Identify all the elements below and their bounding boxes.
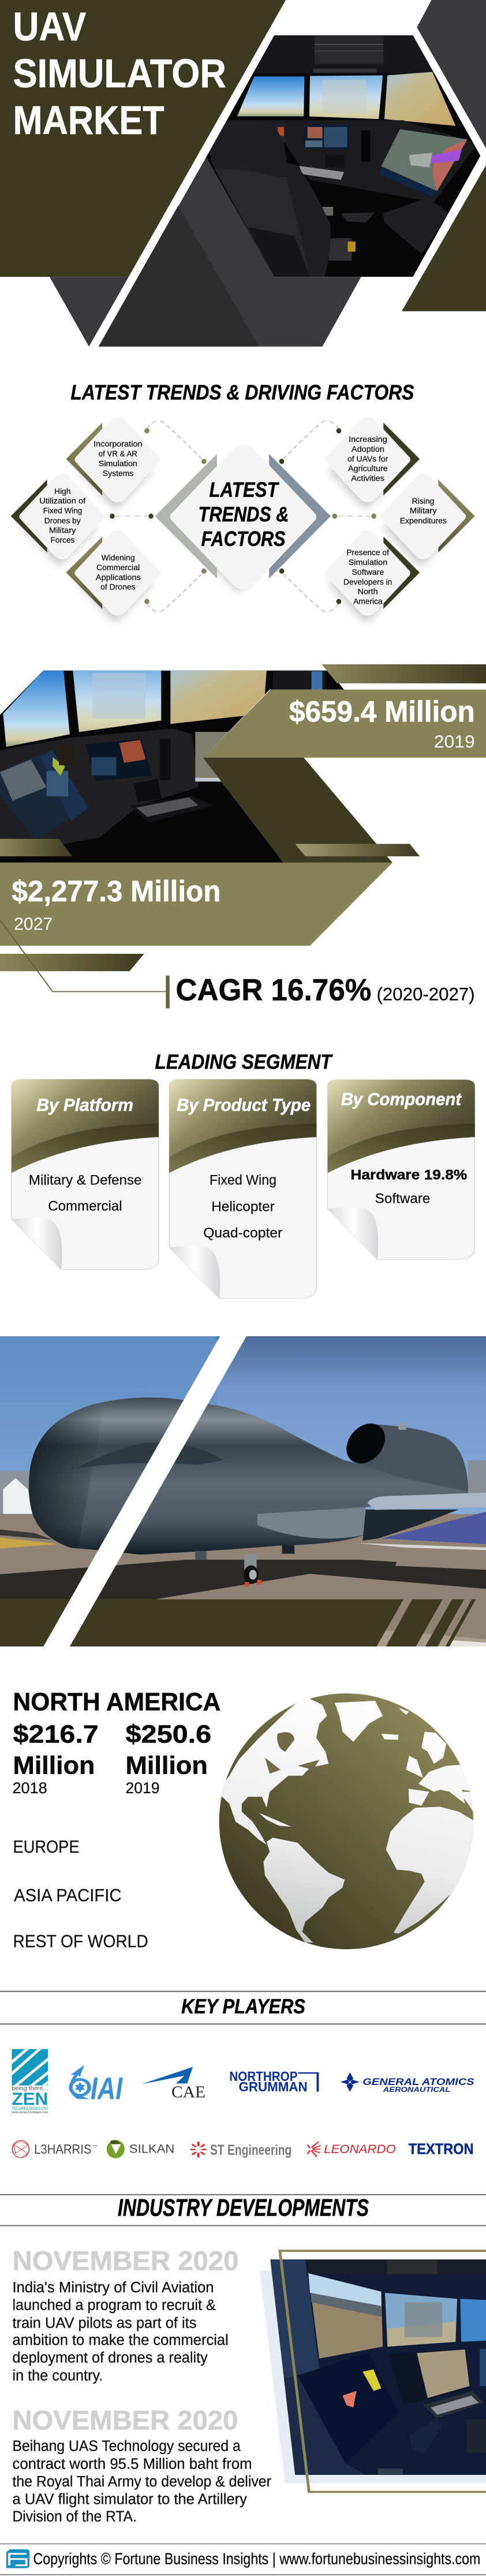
- north america stats: 2019: [125, 1779, 160, 1797]
- shape: lower dark triangle: [99, 206, 259, 347]
- connector lines: [115, 421, 371, 612]
- logo: silkan: [107, 2140, 174, 2158]
- development two: Division of the RTA.: [12, 2508, 137, 2525]
- heading rule bottom: [0, 2023, 486, 2025]
- development one: India's Ministry of Civil Aviation: [12, 2280, 214, 2296]
- panel: 2027 value: 2027: [14, 915, 53, 934]
- card: by platform: Military & Defense: [29, 1172, 141, 1188]
- section: regional analysis: [12, 1687, 476, 1951]
- photo frame: [280, 2251, 486, 2492]
- logo: leonardo: LEONARDO: [324, 2142, 396, 2156]
- development one: train UAV pilots as part of its: [12, 2315, 196, 2331]
- diamond: military expenditures: Rising: [412, 497, 434, 505]
- logo: st engineering: [190, 2142, 291, 2158]
- shape: lower right olive facet: [402, 165, 486, 311]
- north america stats: Million: [125, 1751, 208, 1779]
- panel: olive strip with stripes: [0, 1599, 476, 1646]
- heading: LEADING SEGMENT: [155, 1051, 333, 1073]
- diamond: fixed wing drones: Utilization of: [39, 496, 86, 505]
- centre diamond: [155, 452, 331, 593]
- diamond: agriculture: of UAVs for: [347, 455, 388, 463]
- diamond: agriculture: Adoption: [352, 445, 384, 454]
- diamond: commercial applications: [66, 536, 152, 624]
- diamond: agriculture: Activities: [351, 474, 384, 483]
- diamond: agriculture: Agriculture: [348, 464, 388, 473]
- development one: NOVEMBER 2020: [12, 2246, 238, 2276]
- section: key players: [0, 1991, 486, 2195]
- section: market size: [0, 664, 486, 1008]
- photo: simulator station: [267, 2258, 486, 2475]
- heading: KEY PLAYERS: [181, 1995, 305, 2017]
- photo: simulator console: [0, 670, 347, 864]
- logo: zen: TECHNOLOGIES LTD: [12, 2106, 48, 2111]
- centre diamond: LATEST: [209, 478, 279, 501]
- photo: simulator cockpit: [201, 34, 484, 278]
- logo: zen: [12, 2049, 48, 2114]
- north america stats: [12, 1687, 220, 1797]
- photo: global hawk drone: [0, 1336, 486, 1646]
- logo: zen: ZEN: [12, 2089, 48, 2109]
- CAGR value: CAGR 16.76%: [175, 973, 371, 1007]
- bar: small centre accent: [295, 844, 420, 856]
- section: leading segment: [12, 1051, 475, 1299]
- north america stats: $216.7: [13, 1720, 99, 1749]
- section: industry developments: [0, 2195, 486, 2575]
- development two: NOVEMBER 2020: [12, 2405, 238, 2436]
- chevron: dark arrow: [203, 758, 392, 863]
- diamond: military expenditures: Military: [410, 506, 437, 515]
- diamond: software developers: North: [358, 587, 378, 596]
- development two: a UAV flight simulator to the Artillery: [12, 2491, 247, 2508]
- diamond: fixed wing drones: [11, 479, 97, 567]
- card: by component: Software: [375, 1191, 430, 1206]
- development two: [12, 2405, 271, 2525]
- panel: 2027 value: [0, 863, 392, 946]
- card: by platform: [12, 1079, 159, 1270]
- title: [13, 4, 226, 143]
- section: hero banner: [0, 0, 486, 347]
- development two: the Royal Thai Army to develop & deliver: [12, 2473, 271, 2490]
- heading rule industry developments: [0, 2194, 486, 2195]
- diamond: agriculture: Increasing: [349, 435, 387, 444]
- diamond: commercial applications: Commercial: [96, 563, 140, 572]
- development one: ambition to make the commercial: [12, 2332, 229, 2348]
- development two: Beihang UAS Technology secured a: [12, 2438, 241, 2455]
- footer logo: [6, 2549, 29, 2568]
- card: by product type: Quad-copter: [203, 1225, 282, 1240]
- logo: northrop grumman: GRUMMAN: [238, 2080, 308, 2094]
- diamond: VR and AR: of VR & AR: [99, 449, 137, 458]
- region: rest of world: REST OF WORLD: [13, 1932, 148, 1951]
- logo: zen: being there...: [12, 2085, 48, 2091]
- region: asia pacific: ASIA PACIFIC: [14, 1886, 122, 1905]
- logo: leonardo: [308, 2142, 396, 2157]
- logo: zen: www.zentechnologies.com: [12, 2111, 48, 2114]
- bar: CAGR marker: [166, 976, 170, 1008]
- panel: olive title block: [0, 0, 286, 277]
- connector dots: [110, 428, 376, 604]
- diamond: VR and AR: Systems: [103, 469, 133, 478]
- logo: northrop grumman: [229, 2069, 317, 2094]
- diamond: VR and AR: Simulation: [99, 459, 137, 468]
- title: UAV: [13, 4, 86, 49]
- card: by product type: Fixed Wing: [210, 1172, 276, 1188]
- title: SIMULATOR: [13, 51, 226, 96]
- footer rule bottom: [0, 2574, 486, 2575]
- diamond: fixed wing drones: Military: [49, 526, 76, 535]
- north america stats: NORTH AMERICA: [13, 1687, 220, 1716]
- card: by product type: [169, 1079, 316, 1299]
- photo backing: [260, 2270, 486, 2484]
- diamond: fixed wing drones: Drones by: [44, 516, 81, 525]
- heading rule: [0, 2225, 486, 2226]
- development one: [12, 2246, 238, 2384]
- diamond: fixed wing drones: Forces: [51, 536, 74, 544]
- diamond: military expenditures: [384, 479, 475, 567]
- diamond: software developers: Presence of: [346, 548, 390, 557]
- shape: lower grey facet: [99, 157, 361, 347]
- diamond: software developers: America: [353, 597, 383, 606]
- panel: 2019 value: [203, 690, 486, 758]
- logo: l3harris: [12, 2140, 98, 2158]
- diamond: military expenditures: Expenditures: [400, 516, 447, 525]
- centre diamond: FACTORS: [201, 527, 286, 551]
- connector line to CAGR: [0, 920, 166, 991]
- diamond: fixed wing drones: High: [54, 487, 70, 496]
- diamond: fixed wing drones: Fixed Wing: [43, 506, 82, 515]
- logo: cae: [141, 2067, 205, 2101]
- diamond: software developers: Software: [352, 568, 384, 577]
- heading rule top: [0, 1991, 486, 1992]
- development one: in the country.: [12, 2367, 103, 2384]
- logo: general atomics: AERONAUTICAL: [383, 2086, 450, 2094]
- section: key players: ST Engineering: [210, 2142, 291, 2158]
- logo: iai: [69, 2065, 123, 2106]
- logo: l3harris: L3HARRIS: [34, 2142, 91, 2157]
- diamond: commercial applications: of Drones: [100, 582, 136, 591]
- logo: northrop grumman: NORTHROP: [229, 2069, 298, 2084]
- shape: top right grey facet: [417, 0, 486, 148]
- diamond: software developers: Developers in: [343, 578, 392, 586]
- panel: 2019 value: 2019: [434, 732, 475, 752]
- region: europe: EUROPE: [13, 1837, 79, 1857]
- bar: lower left accent: [0, 954, 144, 971]
- card: by platform: By Platform: [36, 1095, 133, 1115]
- card: by product type: Helicopter: [211, 1199, 275, 1214]
- card: by component: [328, 1080, 475, 1259]
- card: by platform: Commercial: [48, 1198, 122, 1214]
- card: by product type: By Product Type: [177, 1095, 311, 1115]
- diamond: VR and AR: Incorporation: [94, 440, 142, 448]
- north america stats: 2018: [12, 1779, 47, 1797]
- centre diamond: TRENDS &: [199, 503, 289, 526]
- bar: small left accent: [0, 839, 72, 856]
- panel: 2027 value: $2,277.3 Million: [12, 875, 220, 908]
- diamond: commercial applications: Applications: [96, 573, 141, 582]
- bar: top right accent: [321, 664, 486, 683]
- development one: deployment of drones a reality: [12, 2350, 208, 2366]
- logo: cae: CAE: [171, 2083, 205, 2101]
- globe: [217, 1693, 476, 1949]
- development two: contract worth 95.5 Million baht from: [12, 2456, 252, 2472]
- section: latest trends and driving factors: [11, 381, 475, 624]
- title: MARKET: [13, 98, 165, 143]
- shape: lower left grey triangle: [50, 277, 129, 347]
- north america stats: $250.6: [125, 1720, 211, 1749]
- diamond: commercial applications: Widening: [102, 553, 135, 562]
- logo: silkan: SILKAN: [129, 2142, 174, 2156]
- development one: launched a program to recruit &: [12, 2297, 216, 2314]
- north america stats: Million: [13, 1751, 95, 1779]
- logo: l3harris: TM: [92, 2145, 98, 2147]
- diamond: VR and AR: [66, 422, 152, 511]
- logo: iai: IAI: [91, 2071, 123, 2106]
- logo: general atomics: [341, 2072, 474, 2094]
- diamond: software developers: [330, 536, 420, 624]
- white diagonal stripe: [43, 1336, 246, 1646]
- diamond: software developers: Simulation: [349, 558, 387, 567]
- section: drone photo band: [0, 1336, 486, 1646]
- diamond: agriculture: [330, 422, 420, 511]
